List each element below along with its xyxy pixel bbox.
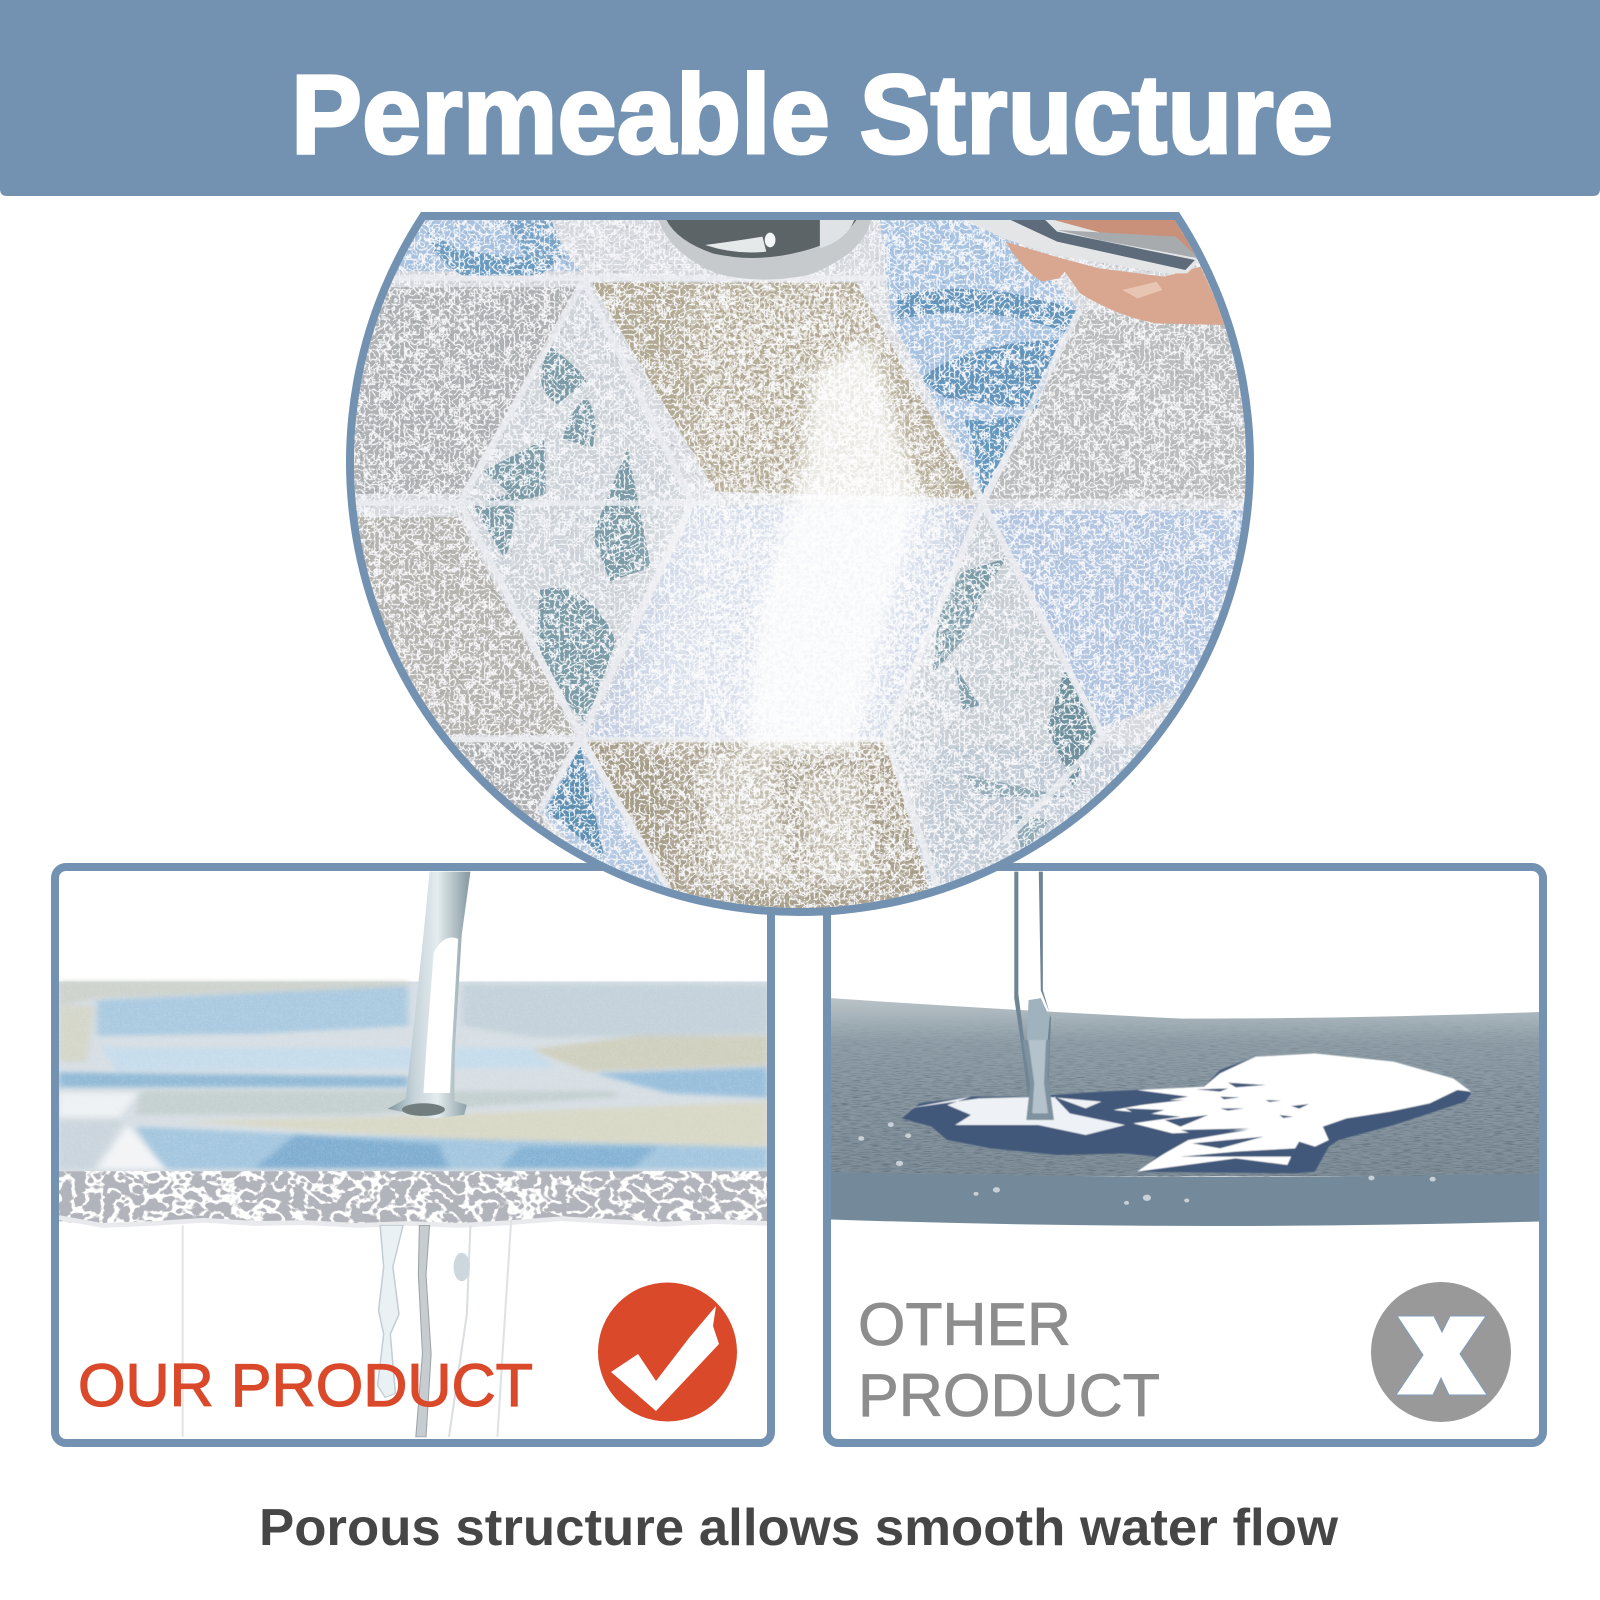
caption: Porous structure allows smooth water flow — [259, 1499, 1339, 1557]
panel: other product — [827, 867, 1543, 1443]
tile colours — [340, 287, 581, 494]
icon: check mark badge — [598, 1282, 737, 1422]
photo: porous mat with water passing through — [59, 872, 770, 1437]
circle frame — [346, 212, 1254, 916]
shower head and hand — [657, 217, 1226, 325]
water stream from above — [388, 872, 470, 1119]
water drips — [183, 1219, 511, 1437]
water stream — [1014, 872, 1051, 1096]
teal leaves — [472, 347, 1097, 857]
panel frame: our product — [55, 867, 771, 1443]
label: our product: OUR PRODUCT — [78, 1352, 533, 1419]
panel: our product — [55, 867, 771, 1443]
shower head — [657, 217, 872, 280]
mat pattern — [340, 212, 1260, 922]
puddle — [902, 1040, 1471, 1173]
label: other product: OTHER — [858, 1291, 1071, 1358]
header banner — [0, 0, 1600, 196]
photo: non-permeable mat with puddle — [831, 872, 1541, 1226]
circular photo: shower over the mat — [346, 212, 1254, 916]
tile seams — [340, 278, 1103, 920]
mat edge — [59, 1171, 768, 1225]
mesh texture — [340, 212, 1260, 922]
label: other product: PRODUCT — [858, 1362, 1160, 1429]
blue leaf strokes — [428, 232, 563, 276]
panel frame: other product — [827, 867, 1543, 1443]
title: Permeable Structure — [291, 52, 1333, 177]
label: other product — [858, 1291, 1160, 1429]
icon: cross badge — [1371, 1282, 1511, 1422]
droplets — [858, 1122, 1436, 1205]
hand holding shower handle — [965, 217, 1226, 325]
water spray — [620, 285, 960, 890]
